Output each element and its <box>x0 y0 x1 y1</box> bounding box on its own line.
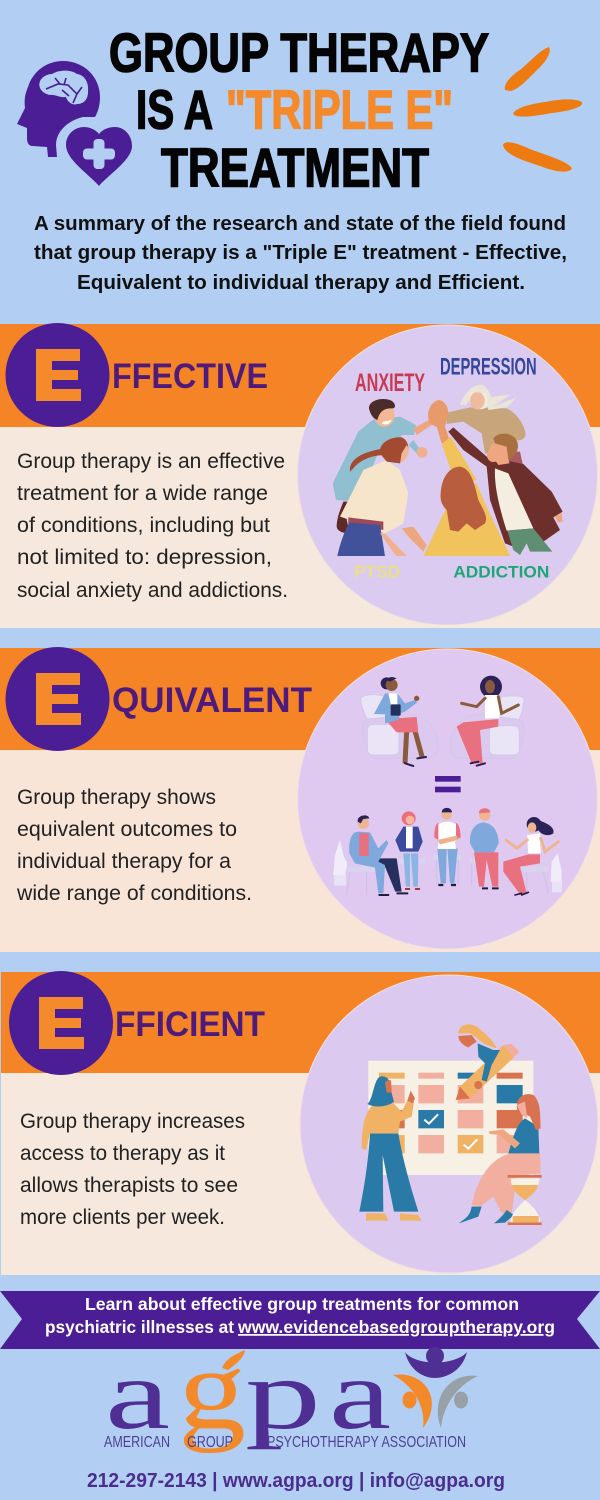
text: equivalent description: individual therapy for a <box>17 850 231 873</box>
text: equivalent description: Group therapy shows <box>17 786 216 809</box>
person 3 <box>437 848 458 883</box>
illustration: high-five circle: DEPRESSION <box>440 353 537 380</box>
man in blue <box>333 417 416 502</box>
text: equivalent description <box>16 786 252 905</box>
text: efficient description: Group therapy increases <box>20 1110 245 1133</box>
logo: AGPA: a <box>105 1339 170 1450</box>
logo: AGPA: PSYCHOTHERAPY ASSOCIATION <box>267 1434 466 1451</box>
illustration: high-five circle: ADDICTION <box>453 562 549 581</box>
heading: equivalent: QUIVALENT <box>112 681 312 720</box>
illustration: individual equals group therapy circle <box>298 649 598 949</box>
ponytail woman <box>340 460 408 533</box>
text: effective description: not limited to: depression, <box>17 546 272 569</box>
group row plants and chairs <box>333 840 347 875</box>
logo: AGPA: AMERICAN <box>104 1434 170 1451</box>
summary text: Equivalent to individual therapy and Efficient. <box>77 272 525 294</box>
icon: head with brain and heart <box>17 61 132 186</box>
banner: learn more ribbon: Learn about effective group treatments for common <box>85 1294 519 1314</box>
summary text: that group therapy is a "Triple E" treatment - Effective, <box>34 242 567 264</box>
badge: letter E <box>9 971 113 1075</box>
banner: learn more ribbon <box>0 1291 600 1349</box>
man in brown jacket <box>448 427 563 547</box>
calendar <box>368 1061 533 1175</box>
logo: AGPA: GROUP <box>187 1434 233 1451</box>
panel: equivalent <box>0 647 600 952</box>
text: equivalent description: wide range of conditions. <box>16 882 252 905</box>
illustration: high-five circle <box>298 325 598 625</box>
text: efficient description: allows therapists to see <box>20 1174 238 1197</box>
badge: letter E <box>6 647 110 751</box>
title: GROUP THERAPY <box>109 22 489 84</box>
icon: logo figures <box>393 1347 478 1428</box>
text: effective description <box>17 450 288 602</box>
equals sign <box>435 776 461 782</box>
banner: learn more ribbon: psychiatric illnesses at <box>45 1317 234 1337</box>
logo: AGPA: g <box>178 1326 246 1454</box>
hourglass <box>508 1175 542 1178</box>
therapist chairs <box>361 695 524 758</box>
text: effective description: of conditions, including but <box>17 514 270 537</box>
woman in yellow <box>423 483 510 556</box>
person 4 <box>474 852 498 887</box>
illustration: calendar scheduling circle <box>300 975 598 1273</box>
hands high five <box>428 400 450 443</box>
illustration: high-five circle: PTSD <box>354 561 400 581</box>
woman on pencil <box>456 1045 514 1100</box>
logo: AGPA: p <box>245 1339 321 1450</box>
text: equivalent description: equivalent outcomes to <box>17 818 237 841</box>
text: effective description: social anxiety and addictions. <box>17 579 288 602</box>
heading: effective: FFECTIVE <box>112 357 268 396</box>
title: TREATMENT <box>161 136 429 198</box>
woman left with hijab <box>359 1133 418 1212</box>
person 1 <box>367 858 402 892</box>
logo: AGPA <box>104 1326 478 1454</box>
title: "TRIPLE E" <box>226 78 453 140</box>
summary text <box>34 213 567 294</box>
person 5 <box>503 854 540 893</box>
banner: learn more ribbon: www.evidencebasedgrouptherapy.org <box>237 1317 555 1337</box>
panel: effective <box>0 323 600 628</box>
title <box>109 22 489 198</box>
panel: efficient <box>1 971 600 1275</box>
text: effective description: Group therapy is an effective <box>17 450 285 473</box>
person 2 <box>403 853 418 887</box>
summary text: A summary of the research and state of the field found <box>34 213 566 235</box>
logo: AGPA: a <box>329 1339 391 1450</box>
illustration: high-five circle: ANXIETY <box>355 370 425 397</box>
heading: efficient: FFICIENT <box>115 1005 265 1044</box>
contact line: 212-297-2143 | www.agpa.org | info@agpa.org <box>87 1470 505 1492</box>
therapist right <box>480 676 502 698</box>
text: efficient description <box>20 1110 245 1229</box>
text: efficient description: access to therapy as it <box>20 1142 225 1165</box>
text: efficient description: more clients per week. <box>20 1206 225 1229</box>
title: IS A <box>136 78 213 140</box>
therapist left <box>405 731 422 763</box>
badge: letter E <box>6 323 110 427</box>
woman right seated <box>472 1153 541 1213</box>
icon: orange accent streaks <box>503 47 582 172</box>
blonde woman <box>487 395 510 408</box>
text: effective description: treatment for a wide range <box>17 482 268 505</box>
